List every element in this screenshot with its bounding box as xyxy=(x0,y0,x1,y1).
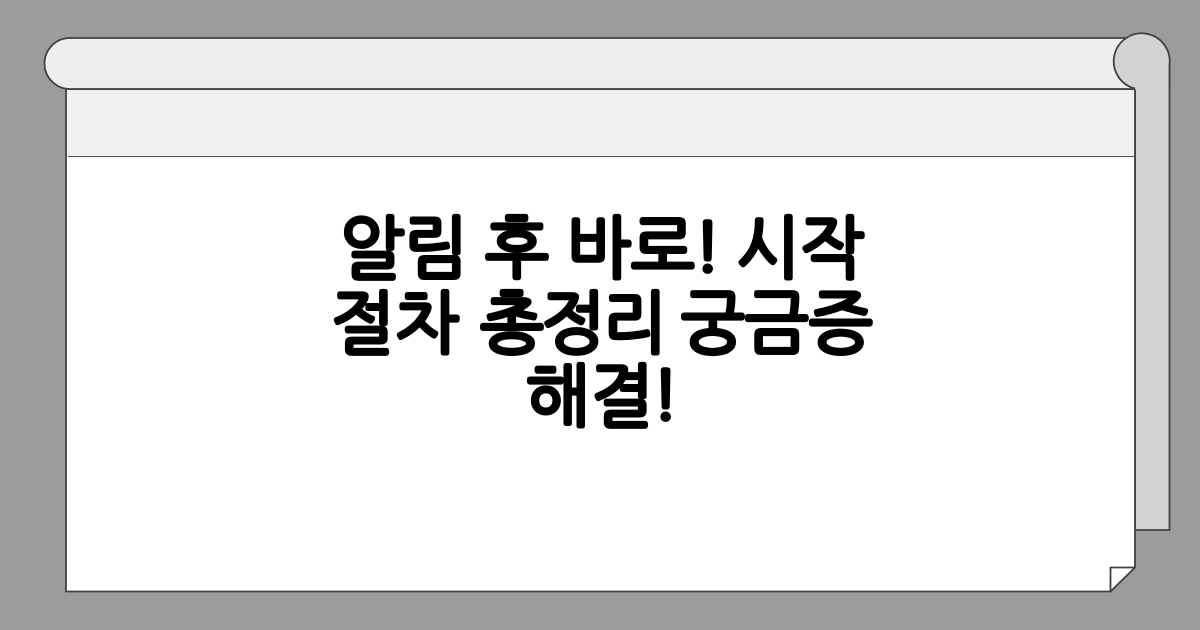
title: 궁금증 xyxy=(681,289,873,357)
title: 알림 xyxy=(340,214,468,282)
shaded header strip xyxy=(67,90,1134,156)
title: 절차 xyxy=(331,289,459,357)
roll end cap xyxy=(1113,34,1169,90)
header strip rule xyxy=(68,156,1134,157)
roll end cap outline xyxy=(1114,33,1170,90)
title: ! xyxy=(693,214,722,282)
title: 시작 xyxy=(736,214,864,282)
title: 바로 xyxy=(567,214,695,282)
title: 해결 xyxy=(526,362,654,430)
title: ! xyxy=(651,362,680,430)
title xyxy=(331,214,873,430)
folded corner flap xyxy=(1110,568,1135,592)
title: 후 xyxy=(485,214,549,282)
paper body with folded corner xyxy=(66,89,1135,592)
right back band of scroll xyxy=(1135,65,1170,530)
top roll of scroll xyxy=(44,38,1142,89)
title: 총정리 xyxy=(480,289,664,357)
